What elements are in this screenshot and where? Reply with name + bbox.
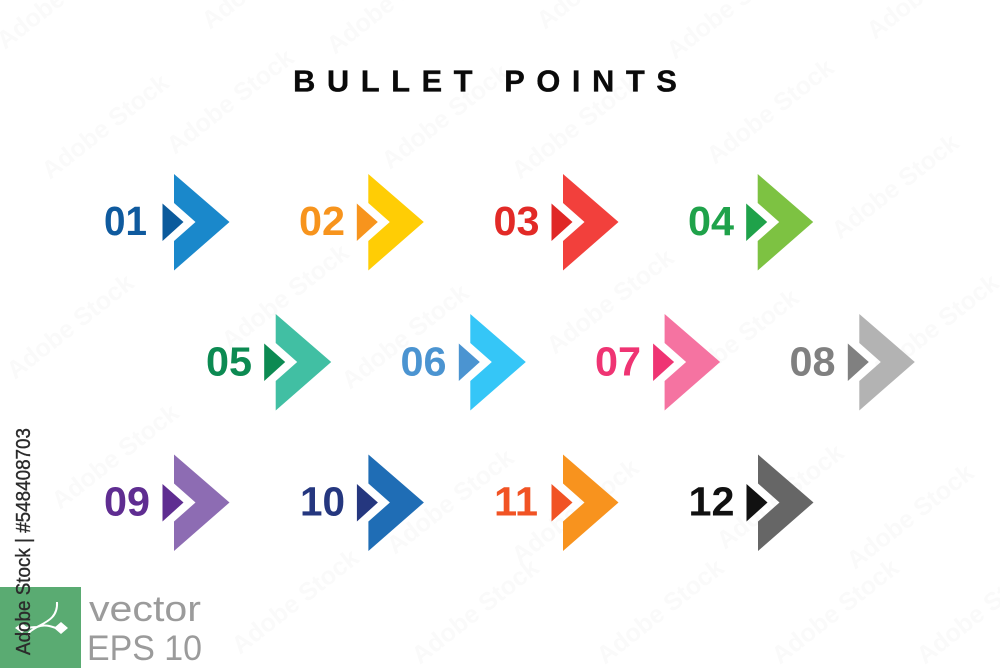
text: Adobe Stock — [1, 269, 139, 385]
text: Adobe Stock — [866, 269, 1000, 385]
bullet 01 — [104, 174, 230, 270]
text: Adobe Stock — [226, 544, 364, 660]
bullet 02: 02 — [299, 198, 345, 244]
bullet 05: 05 — [206, 338, 252, 384]
bullet 07: 07 — [595, 338, 641, 384]
bullet 12: 12 — [688, 478, 734, 524]
bullet 11: 11 — [494, 478, 538, 524]
bullet 01: 01 — [104, 198, 147, 244]
vector badge — [0, 587, 81, 668]
EPS 10 label: EPS 10 — [87, 629, 202, 668]
text: Adobe Stock — [506, 69, 644, 185]
text: Adobe Stock — [591, 554, 729, 668]
text: Adobe Stock — [701, 54, 839, 170]
bullet 07 — [595, 314, 720, 410]
text: Adobe Stock — [376, 59, 514, 175]
bullet 09 — [104, 454, 230, 551]
text: Adobe Stock — [541, 244, 679, 360]
bullet 10 — [300, 454, 424, 551]
stock id label: Adobe Stock | #548408703 — [13, 428, 35, 655]
text: Adobe Stock — [826, 129, 964, 245]
text: Adobe Stock — [711, 439, 849, 555]
text: Adobe Stock — [506, 454, 644, 570]
text: Adobe Stock — [406, 554, 544, 668]
bullet 08 — [790, 314, 915, 410]
bullet 09: 09 — [104, 478, 150, 524]
bullet 06 — [400, 314, 526, 410]
text: Adobe Stock — [161, 44, 299, 160]
text: Adobe Stock — [381, 444, 519, 560]
bullet 06: 06 — [400, 338, 446, 384]
vector label: vector — [89, 588, 201, 629]
bullet 02 — [299, 174, 424, 270]
bullet 10: 10 — [300, 478, 345, 524]
title: BULLET POINTS — [293, 64, 684, 98]
text: Adobe Stock — [216, 239, 354, 355]
bullet 04: 04 — [688, 198, 734, 244]
bullet 03: 03 — [494, 198, 540, 244]
text: Adobe Stock — [666, 284, 804, 400]
bullet 04 — [688, 174, 813, 270]
text: Adobe Stock — [46, 399, 184, 515]
bullet 12 — [688, 454, 814, 551]
text: Adobe Stock — [766, 554, 904, 668]
bullet 08: 08 — [790, 338, 836, 384]
bullet 03 — [494, 174, 618, 270]
text: Adobe Stock — [336, 279, 474, 395]
text: Adobe Stock — [36, 69, 174, 185]
bullet 11 — [494, 454, 618, 551]
bullet 05 — [206, 314, 331, 410]
text: Adobe Stock — [841, 459, 979, 575]
